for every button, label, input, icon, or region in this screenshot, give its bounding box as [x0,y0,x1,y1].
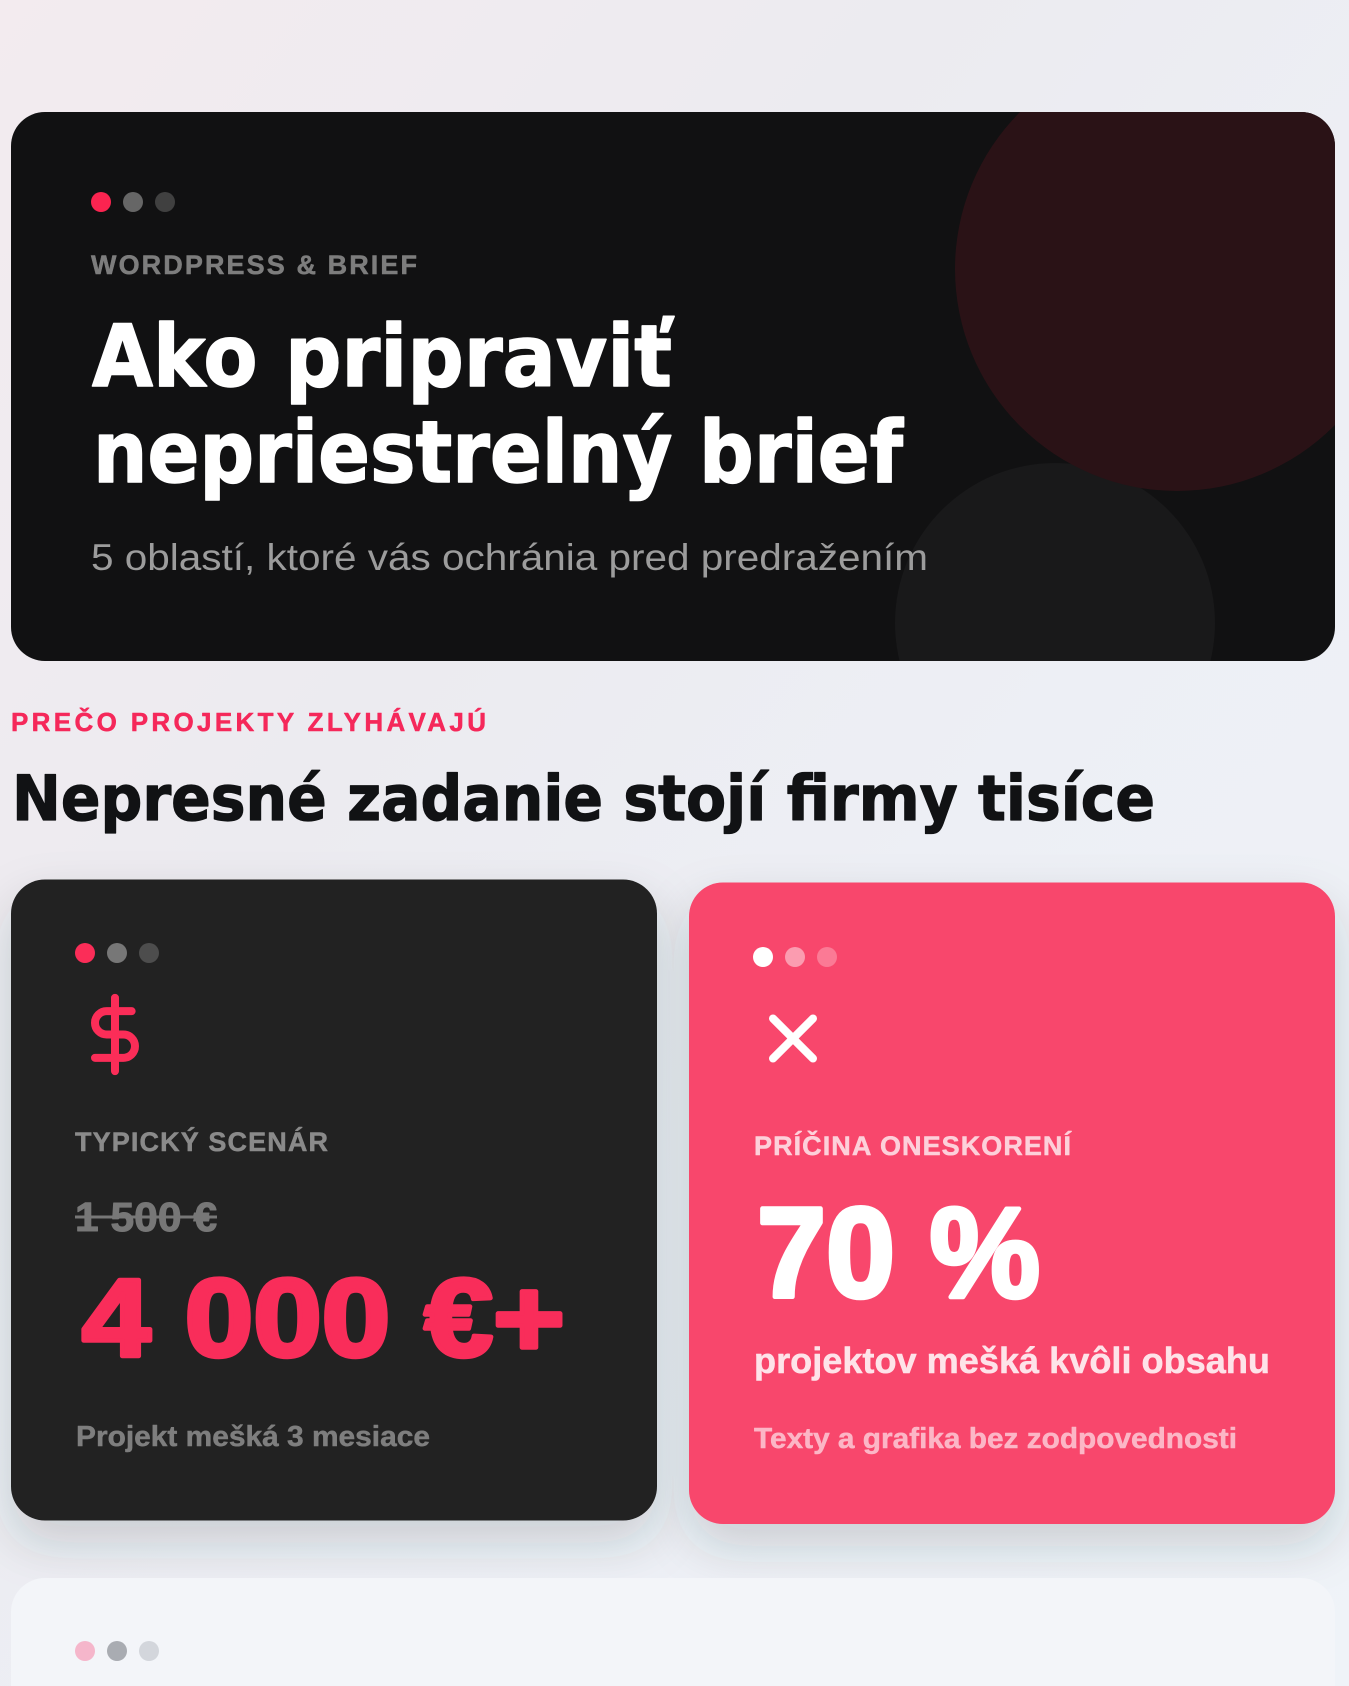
old price: 1 500 € [75,1194,217,1240]
section eyebrow: PREČO PROJEKTY ZLYHÁVAJÚ [11,707,486,737]
decorative circles [955,112,1335,491]
icon: dollar [95,998,135,1071]
new price: 4 000 €+ [82,1257,565,1380]
section heading: Nepresné zadanie stojí firmy tisíce [12,762,1155,835]
card dots [75,943,159,963]
card note: Texty a grafika bez zodpovednosti [754,1423,1237,1455]
panel: typical scenario card [11,880,657,1520]
hero eyebrow: WORDPRESS & BRIEF [91,250,417,280]
card label: TYPICKÝ SCENÁR [75,1126,328,1157]
hero subtitle: 5 oblastí, ktoré vás ochránia pred predražením [91,537,928,578]
card statement: projektov mešká kvôli obsahu [754,1340,1270,1381]
card label: PRÍČINA ONESKORENÍ [754,1130,1072,1161]
panel: next card [11,1578,1335,1686]
card dots [75,1641,159,1661]
icon: cross [773,1018,813,1058]
card note: Projekt mešká 3 mesiace [76,1421,430,1453]
hero dots [91,192,175,212]
panel: hero [11,112,1335,661]
hero title: nepriestrelný brief [93,403,904,503]
hero title [92,307,904,503]
panel: delay cause card [689,882,1335,1524]
hero title: Ako pripraviť [92,307,675,407]
card dots [753,947,837,967]
big number: 70 % [757,1182,1040,1325]
